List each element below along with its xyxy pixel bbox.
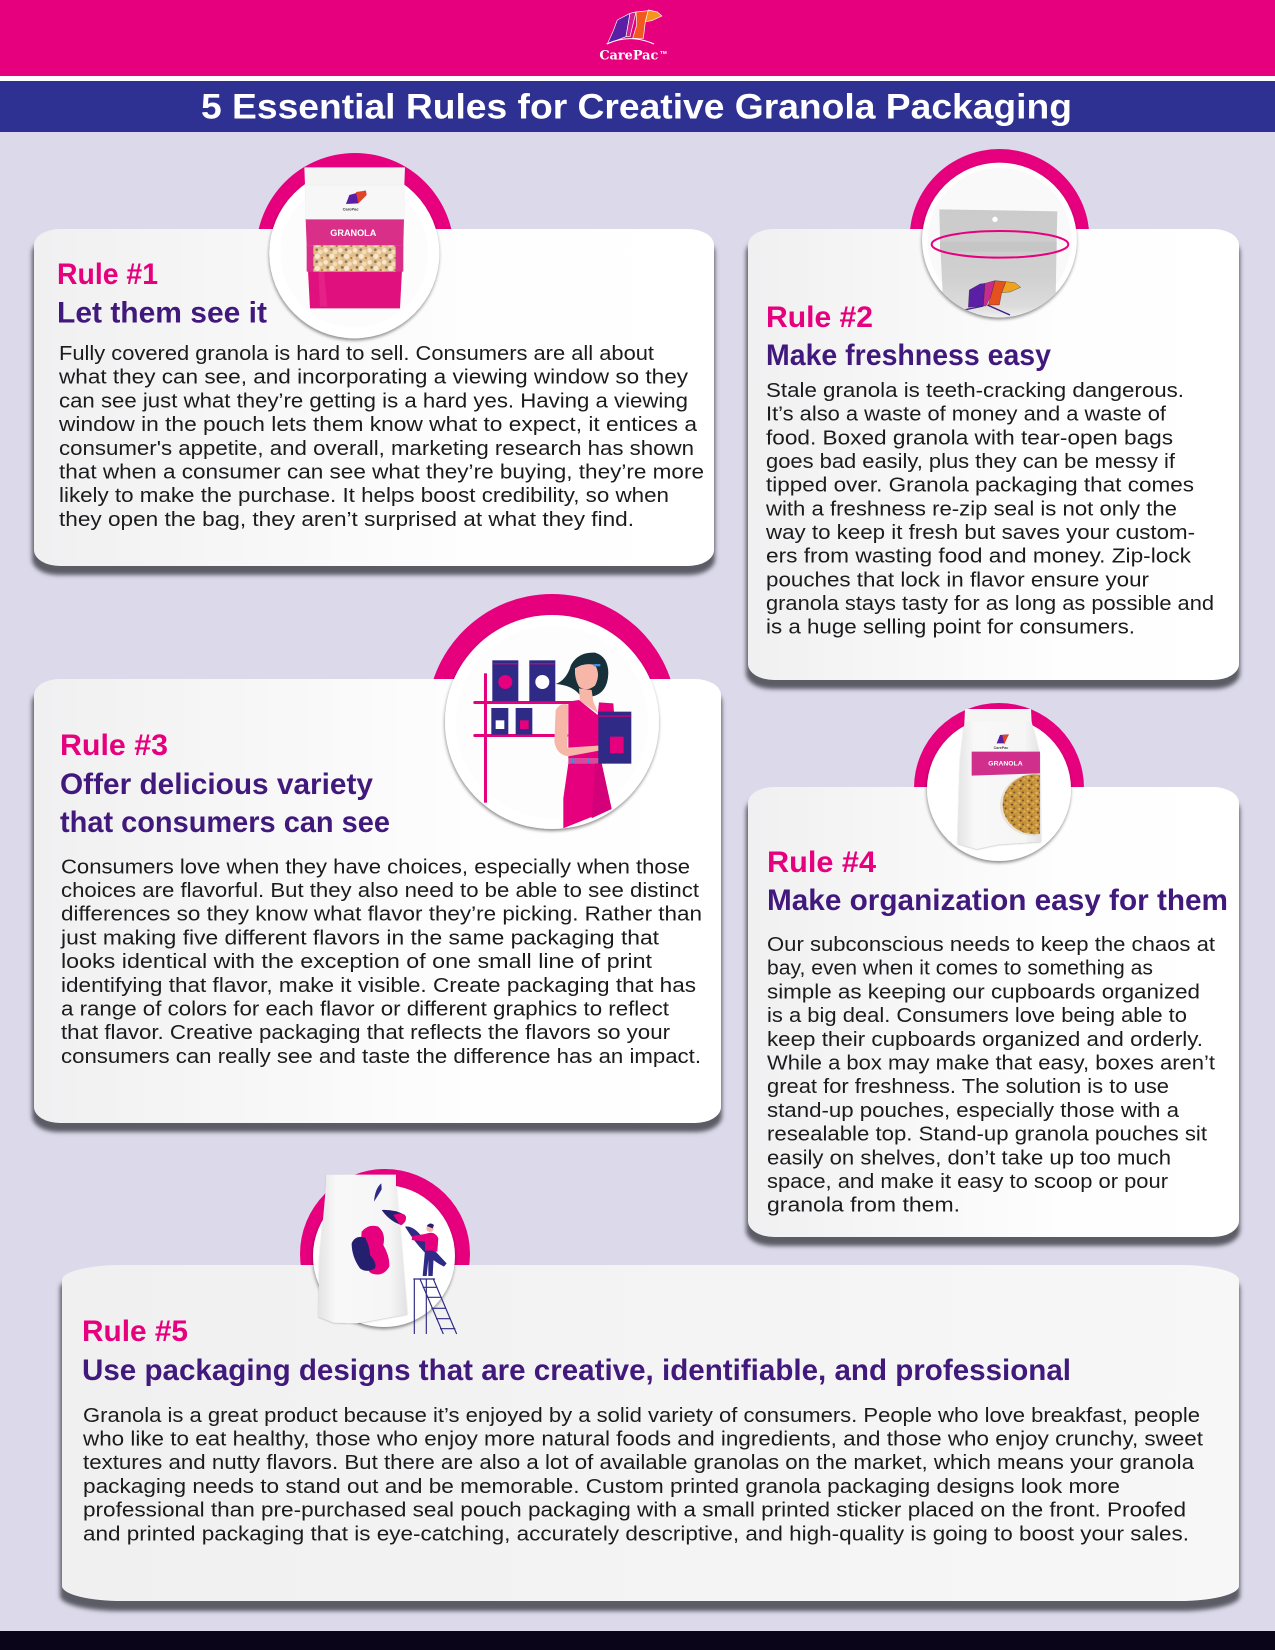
rule 4 text: stand-up pouches, especially those with a	[767, 1100, 1180, 1122]
rule 2 text: is a huge selling point for consumers.	[766, 617, 1135, 639]
brush	[382, 1210, 447, 1267]
rule 2 text: food. Boxed granola with tear-open bags	[766, 427, 1173, 449]
title: 5 Essential Rules for Creative Granola Packaging	[201, 88, 1072, 126]
rule 3 text: consumers can really see and taste the difference has an impact.	[61, 1046, 701, 1068]
rule 5 label: Rule #5	[82, 1315, 188, 1348]
icon: rule 1 granola pouch: GRANOLA	[330, 228, 377, 238]
rule 1 text: likely to make the purchase. It helps boost credibility, so when	[59, 485, 669, 507]
rule 5 text: professional than pre-purchased seal pouch packaging with a small printed sticker placed on the front. Proofed	[83, 1500, 1186, 1522]
icon: rule 4 stand-up granola bag: GRANOLA	[988, 762, 1023, 768]
rule 4 text	[767, 934, 1215, 1217]
rule 4 text: is a big deal. Consumers love being able to	[767, 1005, 1187, 1027]
rule 1 text: they open the bag, they aren’t surprised at what they find.	[59, 509, 634, 531]
rule 4 text: simple as keeping our cupboards organized	[767, 981, 1200, 1003]
panel: rule 4	[746, 787, 1240, 1246]
icon: rule 4 stand-up granola bag: CarePac	[994, 746, 1008, 750]
rule 2 label: Rule #2	[766, 301, 873, 334]
rule 1 text: Fully covered granola is hard to sell. Consumers are all about	[59, 343, 654, 365]
icon: rule 1 granola pouch	[269, 167, 439, 338]
rule 3 text: looks identical with the exception of one small line of print	[61, 951, 653, 973]
rule 4 text: resealable top. Stand-up granola pouches sit	[767, 1124, 1207, 1146]
rule 4 text: easily on shelves, don’t take up too much	[767, 1147, 1171, 1169]
rule 3 text: that flavor. Creative packaging that reflects the flavors so your	[61, 1022, 670, 1044]
rule 5 text: textures and nutty flavors. But there are also a lot of available granolas on the market, which means your granola	[83, 1452, 1195, 1474]
rule 2 text: goes bad easily, plus they can be messy if	[766, 451, 1175, 473]
woman	[554, 653, 631, 828]
icon: rule 5 bag with painter on ladder	[313, 1175, 457, 1334]
rule 4 text: While a box may make that easy, boxes aren’t	[767, 1052, 1215, 1074]
rule 5 text: Granola is a great product because it’s enjoyed by a solid variety of consumers. People who love breakfast, people	[83, 1405, 1200, 1427]
icon: rule 2 zip pouch with highlight	[922, 163, 1077, 320]
rule 1 text	[58, 343, 704, 531]
rule 4 text: keep their cupboards organized and orderly.	[767, 1029, 1203, 1051]
title band	[0, 81, 1275, 132]
logo: CarePac bear: CarePac	[599, 47, 658, 63]
rule 4 text: bay, even when it comes to something as	[767, 958, 1153, 980]
rule 2 text: pouches that lock in flavor ensure your	[766, 569, 1149, 591]
rule 5 heading: Use packaging designs that are creative, identifiable, and professional	[82, 1354, 1071, 1387]
panel: rule 3	[32, 679, 722, 1132]
ladder	[413, 1279, 457, 1334]
rule 4 text: space, and make it easy to scoop or pour	[767, 1171, 1168, 1193]
arcs behind cards	[256, 149, 1090, 1339]
logo: CarePac bear	[599, 10, 667, 63]
rule 3 text: differences so they know what flavor they’re picking. Rather than	[61, 904, 702, 926]
rule 5 text: packaging needs to stand out and be memorable. Custom printed granola packaging designs look more	[83, 1476, 1120, 1498]
rule 4 heading: Make organization easy for them	[767, 884, 1228, 917]
rule 2 text: ers from wasting food and money. Zip-lock	[766, 546, 1192, 568]
painter	[412, 1224, 438, 1276]
rule 1 heading: Let them see it	[57, 297, 267, 330]
rule 1 text: consumer's appetite, and overall, marketing research has shown	[59, 438, 694, 460]
rule 4 text: Our subconscious needs to keep the chaos at	[767, 934, 1215, 956]
rule 2 text: granola stays tasty for as long as possible and	[766, 593, 1214, 615]
logo: CarePac bear: TM	[660, 50, 667, 55]
icon: rule 4 stand-up granola bag	[927, 709, 1071, 861]
icon: rule 1 granola pouch: CarePac	[343, 207, 359, 212]
rule 1 text: that when a consumer can see what they’re buying, they’re more	[59, 462, 704, 484]
rule 4 text: great for freshness. The solution is to use	[767, 1076, 1169, 1098]
panel: rule 5	[60, 1265, 1240, 1611]
rule 2 heading: Make freshness easy	[766, 339, 1051, 372]
rule 1 text: window in the pouch lets them know what to expect, it entices a	[58, 414, 698, 436]
white bag	[318, 1175, 407, 1323]
paint drop	[374, 1183, 382, 1202]
rule 5 text	[82, 1405, 1203, 1545]
icon: bear logo	[964, 281, 1021, 315]
rule 5 text: who like to eat healthy, those who enjoy more natural foods and ingredients, and those who enjoy crunchy, sweet	[82, 1428, 1203, 1450]
rule 2 text: tipped over. Granola packaging that comes	[766, 475, 1194, 497]
rule 3 heading: Offer delicious variety	[60, 768, 373, 801]
rule 3 heading: that consumers can see	[60, 806, 390, 839]
rule 3 text: a range of colors for each flavor or different graphics to reflect	[61, 998, 669, 1020]
rule 1 text: what they can see, and incorporating a viewing window so they	[58, 367, 688, 389]
rule 2 text: way to keep it fresh but saves your custom-	[765, 522, 1195, 544]
rule 3 text: Consumers love when they have choices, especially when those	[61, 856, 690, 878]
rule 3 label: Rule #3	[60, 729, 168, 762]
rule 1 text: can see just what they’re getting is a hard yes. Having a viewing	[59, 390, 688, 412]
rule 2 text: with a freshness re-zip seal is not only the	[765, 498, 1177, 520]
rule 3 text: just making five different flavors in the same packaging that	[60, 927, 660, 949]
rule 2 text: It’s also a waste of money and a waste of	[766, 404, 1166, 426]
footer bar	[0, 1631, 1275, 1650]
rule 1 label: Rule #1	[57, 258, 158, 291]
rule 2 text: Stale granola is teeth-cracking dangerous.	[766, 380, 1184, 402]
rule 2 text	[765, 380, 1214, 639]
panel: rule 2	[746, 229, 1240, 689]
rule 4 text: granola from them.	[767, 1195, 960, 1217]
header band	[0, 0, 1275, 81]
rule 3 text: choices are flavorful. But they also need to be able to see distinct	[61, 880, 699, 902]
rule 5 text: and printed packaging that is eye-catching, accurately descriptive, and high-quality is going to boost your sales.	[83, 1523, 1189, 1545]
rule 3 text: identifying that flavor, make it visible. Create packaging that has	[61, 975, 696, 997]
rule 3 text	[60, 856, 702, 1068]
rule 4 label: Rule #4	[767, 846, 876, 879]
icon: rule 3 woman at shelf	[445, 615, 659, 829]
shelves	[473, 673, 573, 803]
products	[491, 660, 555, 735]
panel: rule 1	[32, 229, 715, 575]
rule 3 heading	[60, 768, 390, 839]
